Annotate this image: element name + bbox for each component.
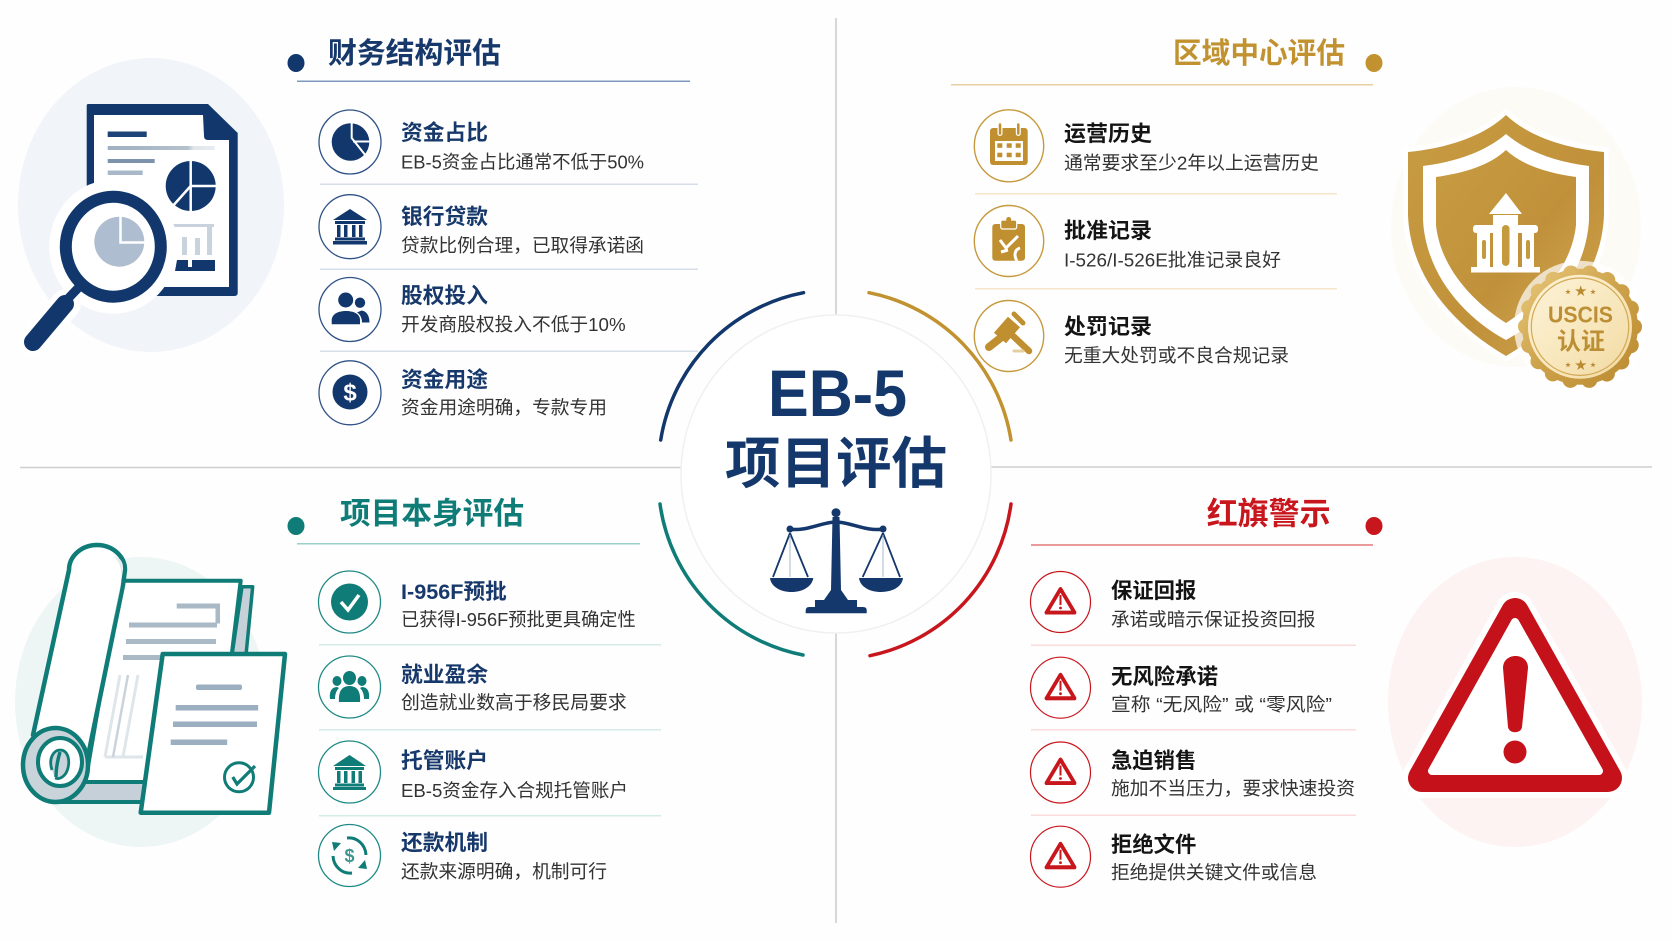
item: 资金用途 xyxy=(319,361,607,425)
item: 处罚记录: 无重大处罚或不良合规记录 xyxy=(1064,345,1289,366)
panel: 区域中心评估 xyxy=(951,37,1382,372)
icon: warning xyxy=(1045,844,1076,869)
item: 资金占比: 资金占比 xyxy=(401,120,488,145)
icon: team xyxy=(330,671,369,702)
item: 处罚记录: 处罚记录 xyxy=(1064,315,1152,339)
icon: bank xyxy=(333,755,366,790)
item: 保证回报: 保证回报 xyxy=(1111,579,1196,603)
seal: USCIS 认证: USCIS xyxy=(1548,302,1613,328)
icon: repayment cycle: $ xyxy=(344,846,355,866)
heading xyxy=(288,37,690,82)
seal: USCIS 认证: 认证 xyxy=(1557,328,1605,356)
icon: check xyxy=(331,584,368,620)
icon: dollar xyxy=(332,374,368,410)
item: 股权投入 xyxy=(319,278,626,342)
item: 还款机制: 还款来源明确，机制可行 xyxy=(401,861,607,882)
item: 还款机制 xyxy=(318,824,607,886)
item: I-956F预批 xyxy=(318,571,636,633)
item: 还款机制: 还款机制 xyxy=(401,831,488,855)
item: I-956F预批: 已获得I-956F预批更具确定性 xyxy=(401,609,636,630)
item: 无风险承诺: 无风险承诺 xyxy=(1111,664,1218,689)
arc: gold xyxy=(869,293,1011,440)
icon: people xyxy=(332,292,370,324)
item: 就业盈余 xyxy=(318,656,627,718)
icon: dollar: $ xyxy=(343,380,357,406)
icon: bank xyxy=(333,209,367,244)
panel: 红旗警示 xyxy=(1030,496,1382,887)
center emblem xyxy=(660,293,1011,656)
panel: 财务结构评估 xyxy=(288,37,698,425)
item: 托管账户: 托管账户 xyxy=(401,749,488,773)
item: 股权投入: 开发商股权投入不低于10% xyxy=(401,314,626,335)
icon: warning xyxy=(1045,760,1076,785)
item: 资金用途: 资金用途 xyxy=(401,367,488,392)
item: 托管账户 xyxy=(318,741,628,803)
item: 资金占比 xyxy=(319,110,644,174)
heading: 财务结构评估 xyxy=(328,37,501,70)
icon: scales xyxy=(770,508,903,613)
item: 股权投入: 股权投入 xyxy=(401,284,488,308)
item: 批准记录: 批准记录 xyxy=(1064,219,1152,243)
seal: USCIS 认证: ★ xyxy=(1590,362,1596,369)
item: 急迫销售: 施加不当压力，要求快速投资 xyxy=(1111,778,1355,799)
item: 无风险承诺 xyxy=(1030,657,1332,718)
heading: 红旗警示 xyxy=(1207,496,1331,532)
icon: building xyxy=(1471,193,1540,272)
seal: USCIS 认证: ★ xyxy=(1590,289,1596,296)
icon: gavel xyxy=(989,314,1029,351)
item: 银行贷款 xyxy=(319,195,644,259)
icon: warning xyxy=(1045,589,1076,614)
heading xyxy=(951,37,1382,86)
heading: 项目本身评估 xyxy=(340,497,524,531)
item: I-956F预批: I-956F预批 xyxy=(401,580,507,604)
seal: USCIS 认证 xyxy=(1514,261,1646,393)
arc: teal xyxy=(660,504,803,655)
title: 项目评估: 项目评估 xyxy=(725,433,947,495)
item: 急迫销售: 急迫销售 xyxy=(1111,749,1196,773)
seal: USCIS 认证: ★ xyxy=(1565,362,1571,369)
item: 运营历史 xyxy=(974,110,1319,182)
seal: USCIS 认证: ★ xyxy=(1575,284,1587,298)
panel: 项目本身评估 xyxy=(288,497,661,886)
item: 就业盈余: 就业盈余 xyxy=(401,662,488,687)
heading xyxy=(288,497,640,544)
illustration: document with magnifier xyxy=(18,58,284,352)
item: 拒绝文件: 拒绝文件 xyxy=(1111,832,1196,857)
item: 拒绝文件 xyxy=(1030,826,1317,887)
item: 拒绝文件: 拒绝提供关键文件或信息 xyxy=(1111,862,1317,883)
item: 保证回报: 承诺或暗示保证投资回报 xyxy=(1111,609,1316,630)
icon: warning xyxy=(1045,675,1076,700)
item: 银行贷款: 贷款比例合理，已取得承诺函 xyxy=(401,235,644,256)
heading: 区域中心评估 xyxy=(1173,37,1345,70)
arc: navy xyxy=(661,293,804,440)
item: 资金用途: 资金用途明确，专款专用 xyxy=(401,397,607,418)
icon: pie chart xyxy=(332,122,371,161)
arc: red xyxy=(870,504,1011,656)
title: EB-5: EB-5 xyxy=(768,356,907,430)
item: 无风险承诺: 宣称 “无风险” 或 “零风险” xyxy=(1111,694,1332,715)
item: 运营历史: 运营历史 xyxy=(1064,122,1152,146)
item: 托管账户: EB-5资金存入合规托管账户 xyxy=(401,780,628,801)
icon: repayment cycle xyxy=(332,838,367,873)
illustration: scroll and document xyxy=(15,545,285,847)
item: 银行贷款: 银行贷款 xyxy=(401,205,488,229)
seal: USCIS 认证: ★ xyxy=(1575,358,1587,372)
item: 资金占比: EB-5资金占比通常不低于50% xyxy=(401,152,644,172)
illustration: shield with USCIS seal xyxy=(1391,87,1646,393)
heading xyxy=(1031,496,1382,546)
item: 保证回报 xyxy=(1030,572,1316,632)
item: 批准记录: I-526/I-526E批准记录良好 xyxy=(1064,250,1281,270)
item: 就业盈余: 创造就业数高于移民局要求 xyxy=(401,692,627,713)
icon: calendar xyxy=(990,124,1028,165)
item: 急迫销售 xyxy=(1030,742,1355,803)
item: 处罚记录 xyxy=(974,300,1289,372)
seal: USCIS 认证: ★ xyxy=(1565,289,1571,296)
item: 运营历史: 通常要求至少2年以上运营历史 xyxy=(1064,152,1319,174)
illustration: big warning triangle xyxy=(1388,557,1642,847)
item: 批准记录 xyxy=(974,206,1281,276)
icon: clipboard xyxy=(992,217,1025,261)
